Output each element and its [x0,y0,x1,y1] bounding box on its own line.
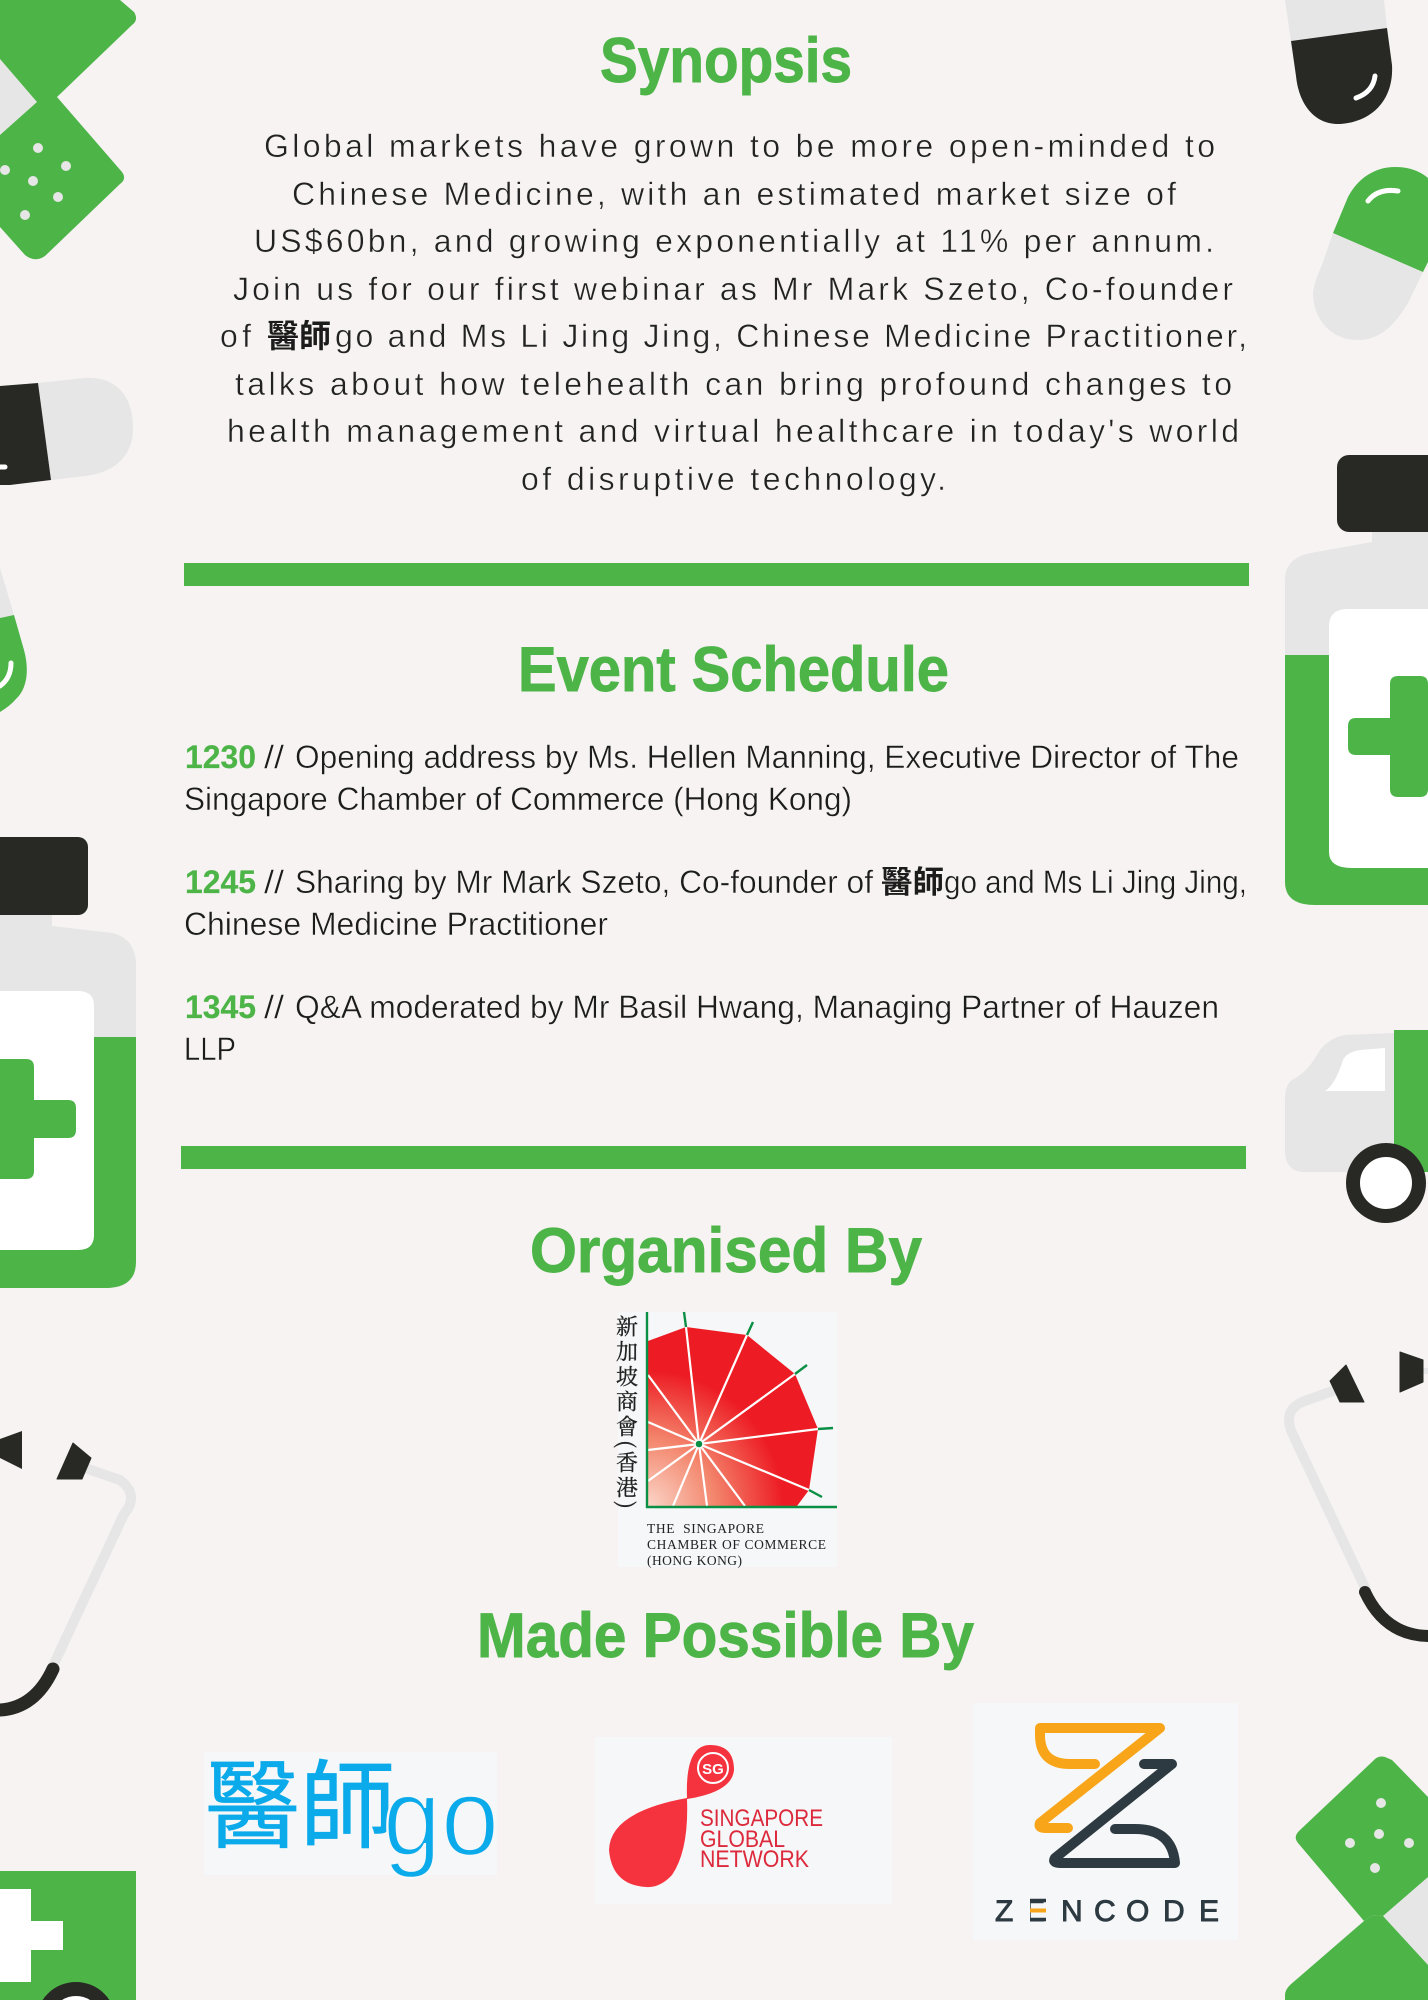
text block: synopsis paragraph: of disruptive technology. [521,461,946,497]
logo: Singapore Chamber of Commerce: CHAMBER OF COMMERCE [647,1537,826,1552]
schedule item 1345: // [264,989,284,1025]
text block: synopsis paragraph: 醫師 [267,311,331,357]
text block: synopsis paragraph: US$60bn, and growing exponentially at 11% per annum. [254,223,1214,259]
heading: Synopsis: Synopsis [600,26,852,96]
schedule item 1245: 1245 [185,864,256,900]
icon: bandage bottom right [1285,1756,1428,2000]
schedule item 1345 [184,989,1219,1067]
logo: Singapore Global Network: GLOBAL [700,1826,785,1853]
text block: synopsis paragraph: go and Ms Li Jing Jing, Chinese Medicine Practitioner, [335,318,1247,354]
text block: schedule list [184,739,1247,1067]
logo: Singapore Chamber of Commerce [612,1312,837,1568]
text block: synopsis paragraph: Chinese Medicine, with an estimated market size of [292,176,1176,212]
logo: 醫師go: 醫師 [205,1729,395,1868]
text block: synopsis paragraph: Global markets have grown to be more open-minded to [264,128,1215,164]
logo: Singapore Global Network: NETWORK [700,1846,809,1873]
text block: synopsis paragraph: health management and virtual healthcare in today's world [227,413,1239,449]
logo: Zencode: ZENCODE [995,1895,1219,1928]
logo: Singapore Chamber of Commerce: 新加坡商會(香港) [612,1315,642,1512]
text block: synopsis paragraph [220,128,1247,497]
logo: Singapore Global Network: SINGAPORE [700,1805,823,1832]
icon: ambulance left bottom [0,1871,136,2000]
schedule item 1230: // [264,739,284,775]
icon: capsule left lower [0,568,27,712]
schedule item 1245: 醫師 [881,857,944,902]
icon: medicine bottle right [1285,455,1428,905]
schedule item 1345: 1345 [185,989,256,1025]
schedule item 1230 [184,739,1239,817]
icon: bandage top left [0,0,136,259]
schedule item 1245: go and Ms Li Jing Jing, [944,864,1247,900]
logo: Singapore Chamber of Commerce: THE SINGAPORE [647,1521,764,1536]
text block: synopsis paragraph: Join us for our first webinar as Mr Mark Szeto, Co-founder [233,271,1233,307]
logo: Singapore Global Network [595,1737,892,1904]
schedule item 1245 [184,857,1247,942]
schedule item 1230: Opening address by Ms. Hellen Manning, Executive Director of The [295,739,1239,775]
schedule item 1245: Sharing by Mr Mark Szeto, Co-founder of [295,864,873,900]
icon: medicine bottle left [0,837,136,1288]
schedule item 1245: Chinese Medicine Practitioner [184,906,608,942]
icon: stethoscope left [0,1431,131,1710]
schedule item 1245: // [264,864,284,900]
logo: Singapore Global Network: SG [702,1761,724,1778]
logo: 醫師go: go [383,1756,499,1879]
icon: capsule left [0,378,133,485]
logo: Singapore Chamber of Commerce: (HONG KONG) [647,1553,742,1568]
icon: stethoscope right [1289,1352,1428,1636]
divider bar bottom [181,1146,1246,1169]
icon: capsule top right dark [1285,0,1392,124]
heading: Organised By: Organised By [530,1216,922,1286]
text block: synopsis paragraph: of [220,318,251,354]
logo: Zencode [973,1703,1238,1940]
icon: capsule right green [1313,167,1428,340]
icon: ambulance right [1285,1030,1428,1216]
schedule item 1345: Q&A moderated by Mr Basil Hwang, Managing Partner of Hauzen [295,989,1219,1025]
text block: synopsis paragraph: talks about how telehealth can bring profound changes to [235,366,1232,402]
schedule item 1230: 1230 [185,739,256,775]
divider bar top [184,563,1249,586]
schedule item 1345: LLP [184,1031,236,1067]
heading: Event Schedule: Event Schedule [518,635,949,705]
schedule item 1230: Singapore Chamber of Commerce (Hong Kong) [184,781,852,817]
logo: 醫師go [204,1729,499,1879]
heading: Made Possible By: Made Possible By [477,1601,974,1671]
